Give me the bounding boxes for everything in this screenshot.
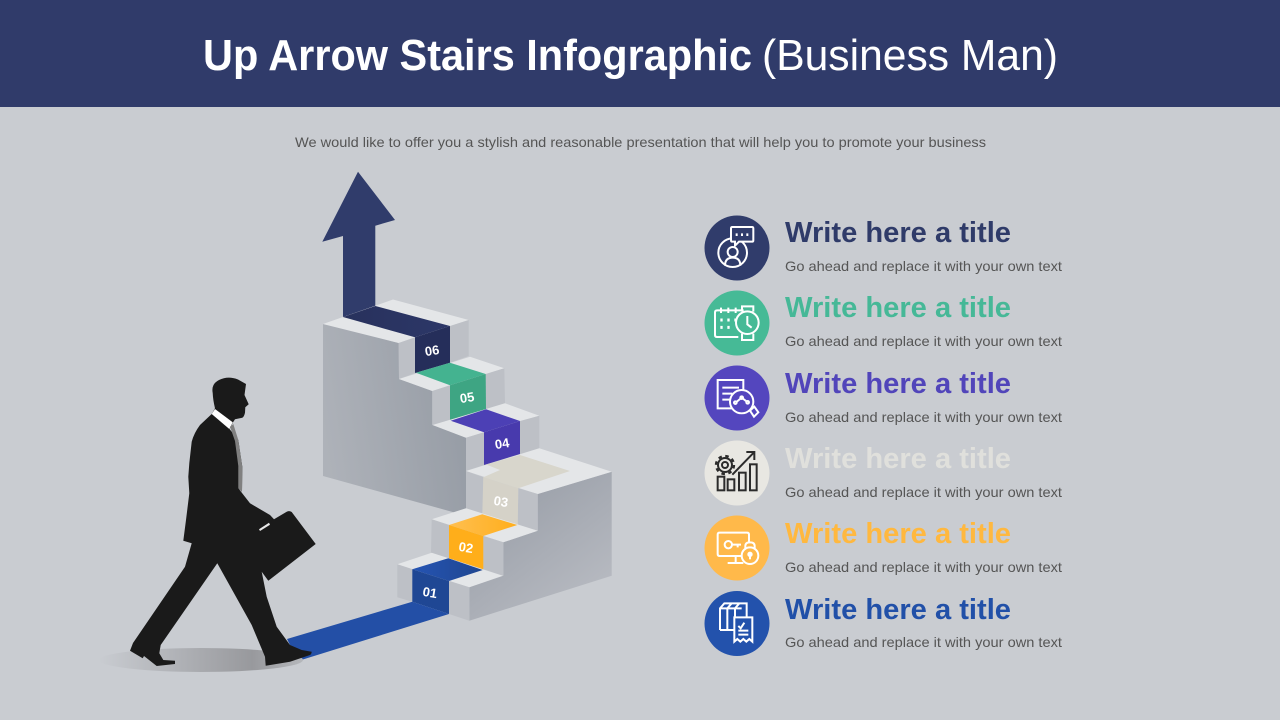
ground shadow — [99, 648, 303, 672]
item title: Write here a title — [785, 443, 1011, 475]
item title: Write here a title — [785, 518, 1011, 550]
step 06 — [323, 300, 469, 379]
shirt collar — [212, 409, 233, 429]
list item 6 — [704, 591, 1062, 656]
subtitle: We would like to offer you a stylish and reasonable presentation that will help you to promote your business — [295, 134, 986, 150]
step 04 — [433, 403, 539, 471]
item text: Go ahead and replace it with your own text — [785, 484, 1062, 500]
icon: boxes and receipt — [704, 591, 770, 656]
stairs diagram — [323, 300, 612, 621]
item title: Write here a title — [785, 594, 1011, 626]
step 04: 04 — [494, 435, 511, 452]
step 03: 03 — [493, 493, 509, 510]
icon: person with speech bubble — [704, 216, 770, 280]
item text: Go ahead and replace it with your own text — [785, 559, 1062, 575]
body — [130, 378, 316, 666]
icon: document with magnifier — [704, 366, 770, 430]
list item 2 — [704, 290, 1062, 356]
right block face — [469, 472, 612, 621]
tie — [230, 424, 242, 492]
list item 1 — [704, 216, 1062, 280]
icon: calendar and watch — [704, 290, 770, 356]
step 03 — [466, 448, 612, 531]
list item 5 — [704, 516, 1062, 580]
item text: Go ahead and replace it with your own text — [785, 333, 1062, 349]
list item 3 — [704, 366, 1062, 430]
item text: Go ahead and replace it with your own text — [785, 634, 1062, 650]
item text: Go ahead and replace it with your own text — [785, 258, 1062, 274]
briefcase handle — [259, 523, 270, 531]
list item 4 — [704, 440, 1062, 506]
step 01: 01 — [422, 584, 438, 601]
step 01 — [397, 553, 503, 621]
blue ramp — [287, 602, 449, 661]
step 05 — [399, 357, 505, 425]
item title: Write here a title — [785, 368, 1011, 400]
title: Up Arrow Stairs Infographic — [203, 31, 752, 80]
icon: monitor with key and lock — [704, 516, 770, 580]
step 05: 05 — [459, 389, 475, 406]
back block face — [323, 324, 466, 516]
step 06: 06 — [424, 342, 440, 359]
up arrow — [322, 172, 395, 317]
item text: Go ahead and replace it with your own text — [785, 409, 1062, 425]
title suffix: (Business Man) — [762, 31, 1058, 80]
header banner — [0, 0, 1280, 107]
step 02: 02 — [458, 539, 474, 556]
item title: Write here a title — [785, 292, 1011, 324]
step 02 — [431, 508, 538, 576]
item title: Write here a title — [785, 217, 1011, 249]
icon: gear and growth chart — [704, 440, 770, 506]
business man silhouette — [130, 378, 316, 666]
